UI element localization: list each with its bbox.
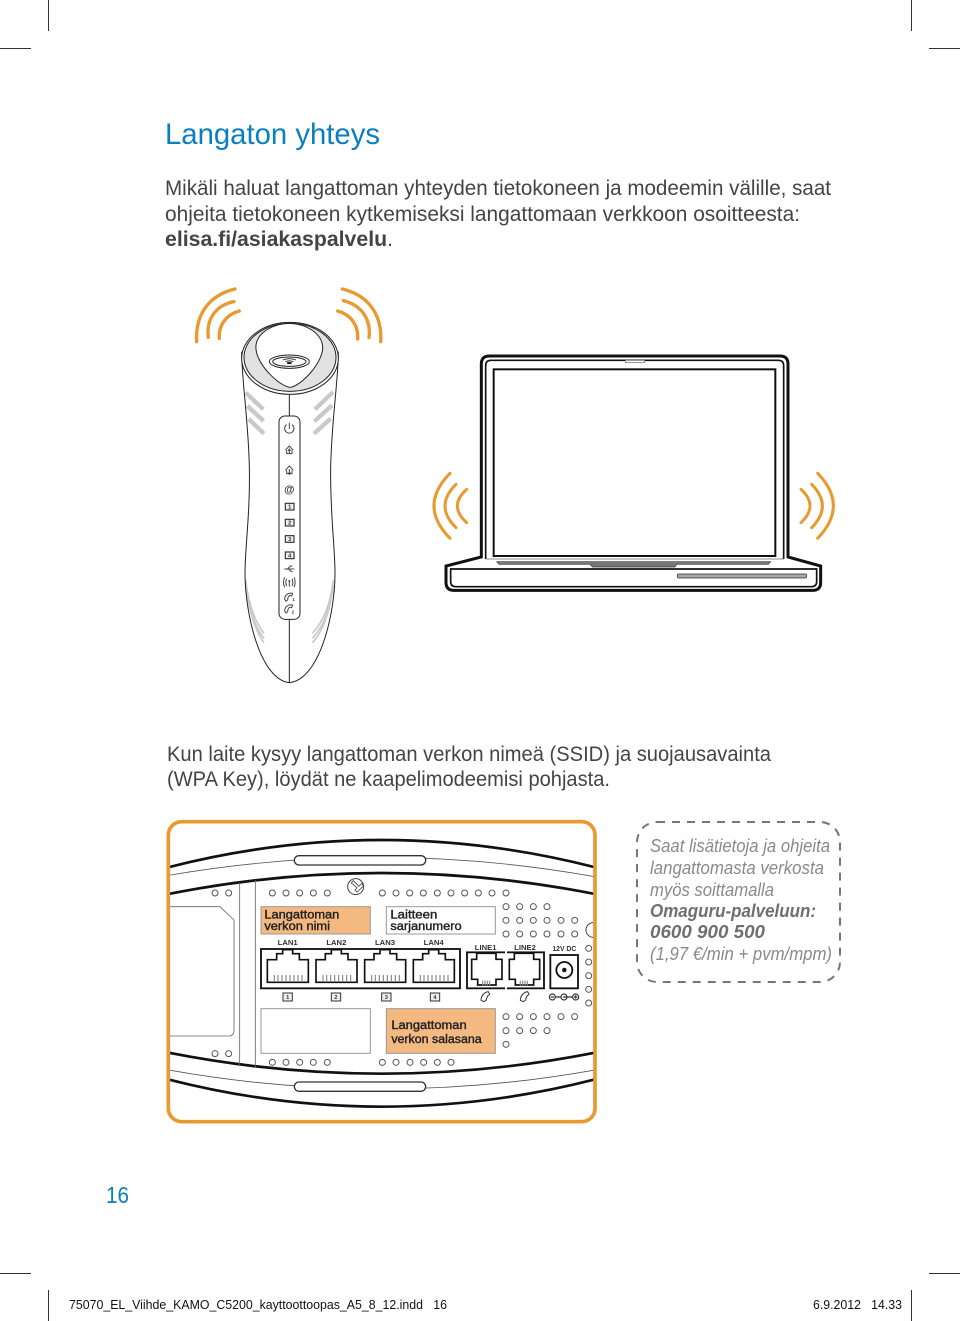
LINE port block: [467, 951, 544, 990]
intro text: Mikäli haluat langattoman yhteyden tietokoneen ja modeemin välille, saat: [165, 177, 831, 200]
port number icons: 2: [334, 995, 338, 1001]
icon: modem wifi arcs: [197, 289, 381, 342]
power socket: [550, 955, 578, 988]
title: Langaton yhteys: [165, 118, 380, 151]
panel frame: [168, 822, 595, 1122]
label: serial number: sarjanumero: [390, 919, 462, 933]
LAN port 4: [413, 950, 454, 982]
LINE port 1: [472, 953, 502, 985]
callout text: (1,97 €/min + pvm/mpm): [650, 944, 832, 964]
modem stripes: [246, 392, 333, 643]
LAN port 1: [267, 950, 308, 982]
footer file name: 75070_EL_Viihde_KAMO_C5200_kayttoottoopas_A5_8_12.indd 16: [69, 1297, 447, 1312]
instruction text: (WPA Key), löydät ne kaapelimodeemisi pohjasta.: [167, 768, 610, 791]
LED port numbers: 1: [288, 505, 291, 511]
laptop outline: [446, 356, 821, 590]
intro text: elisa.fi/asiakaspalvelu.: [165, 228, 393, 251]
icon: screw: [348, 879, 364, 895]
laptop base: [451, 569, 817, 587]
label: wireless password: Langattoman: [391, 1018, 467, 1032]
callout dashed border: [637, 822, 840, 982]
callout text: Omaguru-palveluun:: [650, 901, 816, 921]
LED port numbers: 4: [288, 553, 292, 559]
icon: house down: [285, 466, 293, 474]
LED panel: 2: [292, 609, 295, 614]
modem body: [242, 352, 338, 683]
panel: modem underside: [167, 822, 601, 1122]
laptop camera: [625, 360, 645, 363]
laptop latch: [677, 574, 807, 578]
intro text: ohjeita tietokoneen kytkemiseksi langattomaan verkkoon osoitteesta:: [165, 203, 800, 226]
LINE port pins: [483, 981, 527, 986]
port labels: LINE1: [475, 943, 497, 952]
port labels: LAN2: [326, 938, 346, 947]
laptop lid inner line: [486, 360, 784, 559]
icon: phones: [481, 992, 529, 1002]
icon: modem with wifi signals: [197, 289, 381, 683]
LINE port 2: [509, 953, 540, 985]
callout: phone support: [637, 822, 840, 982]
icon: at: @: [284, 484, 295, 496]
icon: polarity: [549, 994, 579, 1000]
blank label: [261, 1009, 370, 1053]
label: serial number: Laitteen: [390, 907, 437, 921]
port labels: LAN4: [424, 938, 444, 947]
LAN port block: [261, 949, 460, 988]
icon: wifi: [283, 577, 295, 587]
LAN port pins: [274, 975, 448, 981]
footer date: 6.9.2012 14.33: [813, 1297, 902, 1312]
laptop screen: [494, 369, 775, 556]
vent slots: [294, 856, 426, 1091]
callout text: langattomasta verkosta: [650, 858, 824, 878]
modem top: [242, 322, 338, 394]
callout text: 0600 900 500: [650, 922, 765, 942]
label: wireless network name: verkon nimi: [264, 919, 330, 933]
port labels: [278, 940, 576, 951]
callout text: Saat lisätietoja ja ohjeita: [650, 836, 830, 856]
port number icons: 3: [385, 995, 388, 1001]
port labels: 12V DC: [552, 944, 577, 953]
LAN port 3: [365, 950, 406, 982]
housing curves: [167, 840, 597, 1107]
port labels: LINE2: [514, 943, 536, 952]
icon: phone 2: [285, 605, 293, 613]
LED port numbers: 3: [288, 537, 291, 543]
port number icons: [283, 993, 440, 1001]
icon: laptop wifi arcs: [434, 473, 833, 538]
port labels: LAN1: [278, 938, 298, 947]
callout text: [650, 836, 832, 964]
port number icons: 4: [433, 995, 437, 1001]
LAN port 2: [316, 950, 357, 982]
label: wireless password: verkon salasana: [391, 1032, 482, 1046]
callout text: myös soittamalla: [650, 880, 774, 900]
intro text: [165, 177, 831, 251]
instruction text: Kun laite kysyy langattoman verkon nimeä (SSID) ja suojausavainta: [167, 743, 771, 766]
LED port numbers: [285, 503, 294, 559]
label: wireless network name: Langattoman: [264, 907, 339, 921]
port number icons: 1: [286, 995, 289, 1001]
label: serial number: [386, 907, 495, 934]
icon: screw right: [586, 922, 594, 938]
label: wireless network name: [261, 907, 370, 934]
LED port numbers: 2: [288, 521, 291, 527]
page number: 16: [106, 1182, 129, 1208]
laptop hinge: [497, 562, 771, 567]
instruction text: [167, 743, 771, 791]
icon: house up: [285, 446, 293, 454]
LED panel: [279, 416, 300, 619]
icon: usb: [284, 566, 294, 572]
icon: power: [285, 423, 294, 433]
LED panel: 1: [292, 597, 295, 602]
port labels: LAN3: [375, 938, 395, 947]
partition lines: [167, 880, 255, 1067]
label: wireless password: [386, 1009, 495, 1053]
ventilation dots: [212, 890, 592, 1065]
icon: phone 1: [285, 593, 293, 601]
icon: laptop with wifi signals: [434, 356, 833, 590]
